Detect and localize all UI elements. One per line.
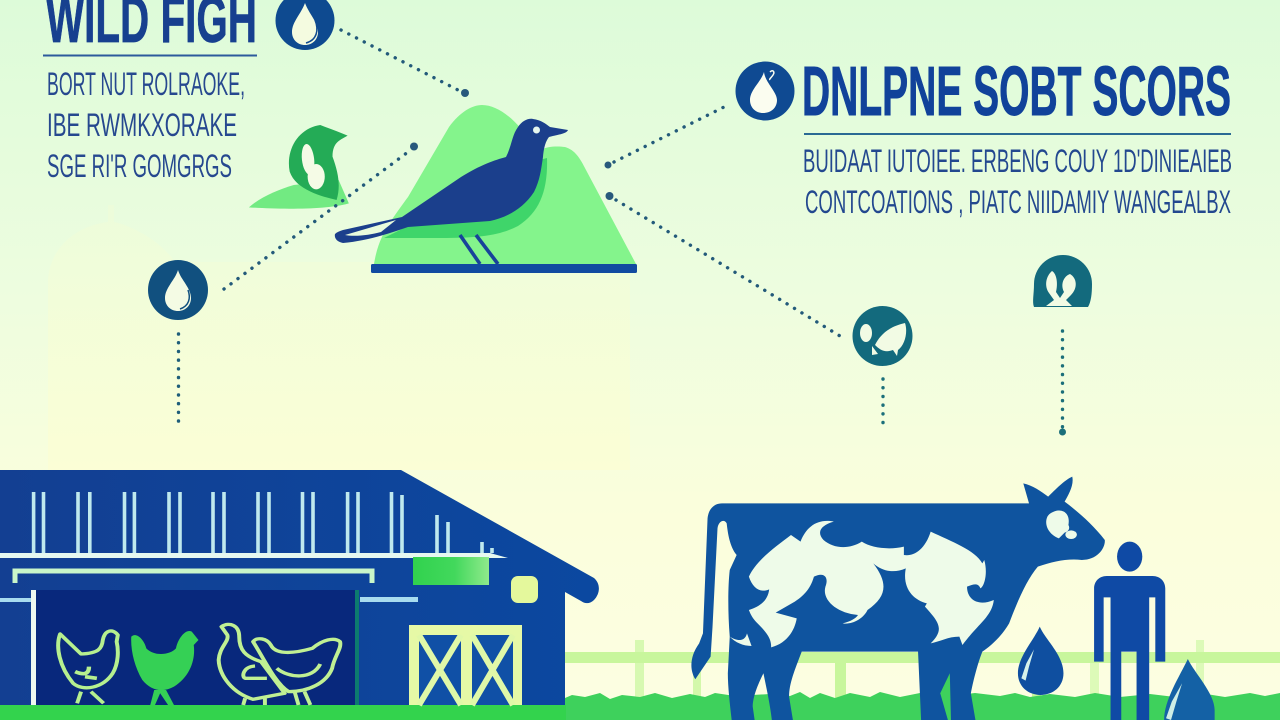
dotted connector: left vertical <box>177 334 180 424</box>
dotted connector: left circle to bird <box>224 142 418 289</box>
bird belly <box>384 158 547 238</box>
side trims <box>0 598 31 602</box>
icon: water drop right <box>736 62 794 120</box>
icon: teal circle with animals <box>852 306 912 366</box>
door header <box>15 571 372 583</box>
cow head patch <box>1046 510 1077 539</box>
bird legs <box>460 235 498 264</box>
bird tail highlight <box>345 220 396 236</box>
door opening <box>36 590 355 705</box>
cow white patch <box>749 521 994 647</box>
dotted connector: top left icon to bird <box>341 30 469 97</box>
icon: small green bird with eggs <box>249 125 349 209</box>
icon: water drop top left <box>276 0 334 50</box>
bird eye <box>533 126 540 134</box>
text block: left description: IBE RWMKXORAKE <box>47 107 237 143</box>
illustration: cow <box>691 477 1105 720</box>
text block: left description <box>47 66 245 184</box>
cow lower crescent <box>730 633 752 646</box>
round window <box>511 576 538 603</box>
icon: water drop left <box>148 260 208 320</box>
text block: right description <box>803 143 1232 220</box>
illustration: barn <box>0 470 599 705</box>
fence <box>565 640 1280 715</box>
illustration: person <box>1094 542 1165 720</box>
icon: water drop near cow <box>1018 627 1063 695</box>
barn building <box>0 470 599 705</box>
bird body <box>335 119 568 243</box>
cow leg gap <box>940 673 951 720</box>
chickens <box>58 624 340 705</box>
icon: teal half circle with animals <box>1033 255 1092 307</box>
perch bar <box>371 264 637 273</box>
text block: left description: SGE RI'R GOMGRGS <box>47 148 232 184</box>
chicken filled 2 <box>131 631 198 705</box>
small barn door <box>409 625 522 705</box>
green hills <box>374 105 636 264</box>
illustration: bird on hills <box>335 105 637 273</box>
chicken outline 1 <box>58 631 118 703</box>
chicken outline 4 <box>253 639 340 705</box>
ground strip <box>0 705 566 720</box>
cow body <box>691 477 1105 720</box>
chicken outline 3 <box>219 624 285 705</box>
dotted connector: teal circle down <box>881 379 885 424</box>
dotted connectors: right of bird <box>604 104 840 336</box>
icon: water drop near person <box>1164 659 1215 720</box>
grass <box>565 692 1280 720</box>
roof beam <box>0 553 508 558</box>
dotted connector: half circle down <box>1059 331 1066 436</box>
roof slats <box>34 492 492 553</box>
green sign <box>413 557 489 585</box>
text block: left description: BORT NUT ROLRAOKE, <box>47 66 245 102</box>
